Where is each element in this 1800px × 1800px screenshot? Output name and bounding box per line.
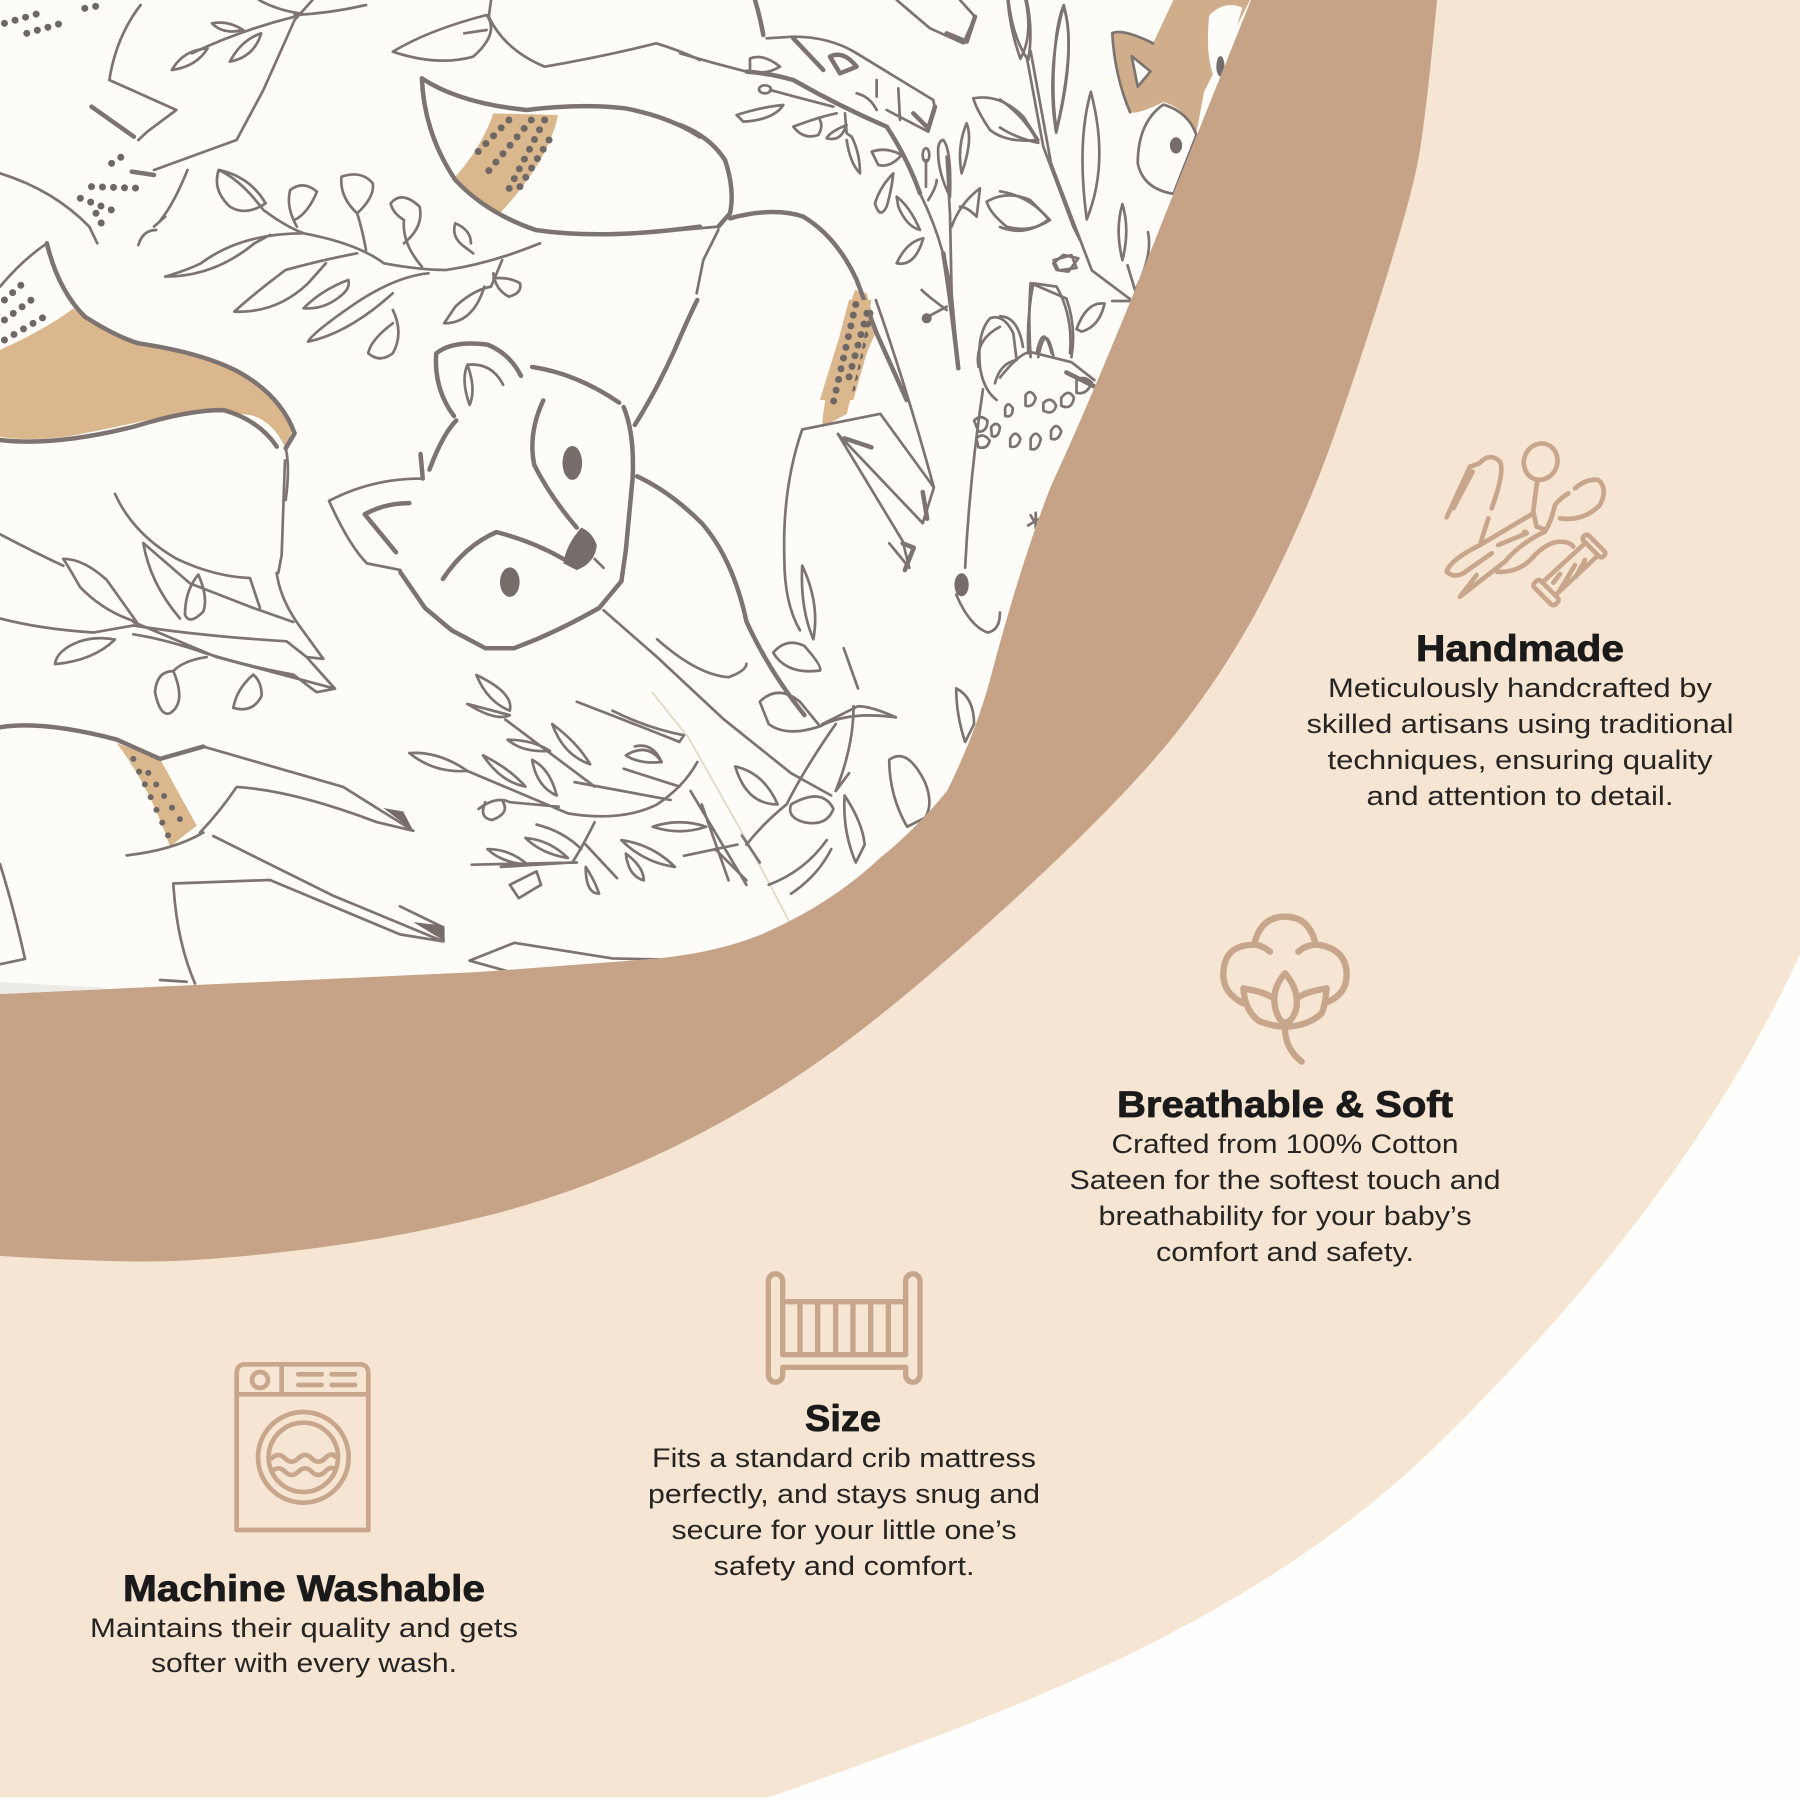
panel: fabric photo with woodland print [0,0,1300,1000]
heading: Size: Size [805,1398,881,1439]
text block: Breathable & Soft description [1070,1129,1500,1267]
feature: Handmade [1306,439,1734,811]
text block: Size description [648,1443,1040,1581]
icon: crib [768,1274,920,1382]
illustration: fox head, hoof and lower botanical branch [329,300,1000,972]
heading: Handmade: Handmade [1416,628,1624,669]
text block: Breathable & Soft description: comfort and safety. [1156,1237,1414,1267]
text block: Handmade description: skilled artisans using traditional [1306,709,1734,739]
text block: Machine Washable description [90,1613,518,1678]
text block: Handmade description: Meticulously handcrafted by [1328,673,1713,703]
text block: Handmade description: techniques, ensuring quality [1328,745,1713,775]
illustration: lower left fox legs and branch [0,461,445,984]
illustration: fox tail and fawn, upper left [0,0,700,500]
illustration: deer face and leaves, upper right [1000,0,1250,528]
text block: Handmade description [1306,673,1734,811]
icon: scissors, needle and thread [1447,439,1606,607]
text block: Breathable & Soft description: breathability for your baby’s [1098,1201,1472,1231]
heading: Machine Washable: Machine Washable [123,1568,485,1609]
text block: Machine Washable description: Maintains their quality and gets [90,1613,518,1643]
icon: cotton boll [1223,917,1347,1062]
feature: Size [648,1274,1040,1581]
text block: Size description: perfectly, and stays snug and [648,1479,1040,1509]
text block: Handmade description: and attention to detail. [1366,781,1674,811]
text block: Size description: Fits a standard crib mattress [652,1443,1036,1473]
text block: Size description: safety and comfort. [714,1551,974,1581]
icon: washing machine [237,1364,368,1530]
feature: Machine Washable [90,1364,518,1678]
illustration: fox leg and botanical branches, upper middle [680,0,1080,400]
heading: Breathable & Soft: Breathable & Soft [1117,1084,1453,1125]
text block: Size description: secure for your little one’s [672,1515,1016,1545]
text block: Breathable & Soft description: Crafted from 100% Cotton [1112,1129,1458,1159]
text block: Machine Washable description: softer with every wash. [151,1648,457,1678]
panel: brown curved band [0,0,1437,1261]
feature: Breathable & Soft [1070,917,1500,1267]
text block: Breathable & Soft description: Sateen for the softest touch and [1070,1165,1500,1195]
